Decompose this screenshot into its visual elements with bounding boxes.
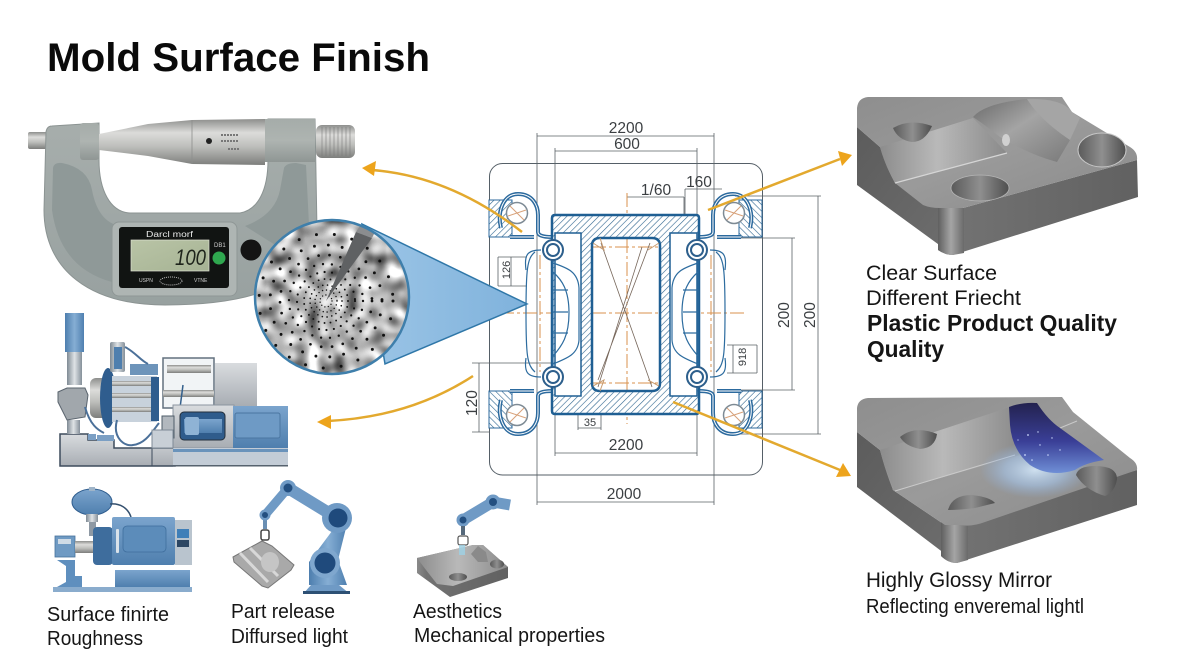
block top face bbox=[857, 97, 1137, 208]
caption: part release bbox=[231, 601, 348, 648]
right cavity bbox=[670, 233, 697, 396]
dimension labels: 918 bbox=[737, 348, 749, 366]
knurled knob bbox=[316, 125, 355, 158]
valve block bbox=[58, 388, 88, 420]
right ridge bbox=[1060, 421, 1077, 428]
right cam profile bbox=[672, 250, 726, 377]
gripped mold part bbox=[233, 541, 294, 588]
caption: part release: Part release bbox=[231, 601, 335, 623]
console window bbox=[180, 412, 225, 440]
caption: glossy mirror: Reflecting enveremal lightl bbox=[866, 596, 1084, 618]
dimension labels bbox=[464, 120, 819, 503]
lower label left: USPN bbox=[139, 278, 153, 284]
collar left bbox=[80, 123, 99, 160]
left cam profile bbox=[525, 250, 579, 377]
caption: glossy mirror: Highly Glossy Mirror bbox=[866, 569, 1052, 592]
rear hub and platen bbox=[90, 378, 108, 418]
status LED bbox=[212, 252, 226, 264]
vertical hopper column bbox=[65, 313, 84, 352]
right recess bbox=[245, 163, 309, 248]
caption: aesthetics bbox=[413, 601, 605, 647]
drawing outer frame bbox=[490, 164, 762, 475]
clamp frame bbox=[163, 358, 214, 408]
dimension labels: 600 bbox=[614, 136, 640, 153]
dimension labels: 2200 bbox=[609, 437, 644, 454]
right hole bbox=[1078, 133, 1126, 167]
dimension lines bbox=[472, 133, 821, 505]
icon: digital micrometer bbox=[28, 119, 355, 305]
magnified textured surface bbox=[250, 215, 415, 380]
arm bbox=[463, 502, 510, 520]
left control box bbox=[55, 536, 75, 557]
LCD brand text: Darcl morf bbox=[146, 230, 194, 239]
title: Mold Surface Finish bbox=[47, 36, 430, 80]
corner brackets bbox=[489, 194, 762, 434]
joints bbox=[280, 480, 296, 496]
tapered barrel bbox=[99, 119, 265, 165]
upper arm links bbox=[288, 488, 337, 518]
arrow: drawing to glossy block bbox=[673, 402, 851, 477]
control console bbox=[173, 405, 234, 448]
hoses bbox=[85, 347, 159, 445]
small label: DB1 bbox=[214, 243, 226, 249]
nozzle block bbox=[162, 416, 174, 438]
front hole bbox=[951, 175, 1009, 201]
mirror galaxy reflection bbox=[1009, 403, 1104, 473]
center lines bbox=[500, 193, 745, 424]
dimension labels: 120 bbox=[464, 390, 481, 416]
dimension labels: 2000 bbox=[607, 486, 642, 503]
lower ridge bbox=[895, 455, 1015, 491]
rear pocket bbox=[893, 122, 932, 142]
caption: surface finish: Roughness bbox=[47, 628, 143, 650]
dimension labels: 200 bbox=[776, 302, 793, 328]
lower label right: VTNE bbox=[194, 278, 208, 284]
caption: aesthetics: Mechanical properties bbox=[414, 625, 605, 647]
block top face bbox=[857, 397, 1137, 526]
side control panel bbox=[175, 520, 192, 565]
pedestal bbox=[115, 570, 190, 587]
dimension labels: 35 bbox=[584, 417, 596, 429]
sloped band bbox=[880, 407, 1020, 491]
block left face bbox=[857, 432, 957, 563]
top cylinder bbox=[110, 342, 125, 372]
hose bbox=[110, 504, 131, 517]
arrow: drawing to molding machine bbox=[317, 376, 473, 429]
dimension labels: 2200 bbox=[609, 120, 644, 137]
anvil bbox=[28, 132, 48, 149]
rear cylinder housing bbox=[215, 363, 257, 406]
caption: part release: Diffursed light bbox=[231, 626, 348, 648]
window cross lines bbox=[598, 243, 652, 387]
block right face bbox=[941, 470, 1137, 563]
console panel bbox=[235, 413, 280, 438]
dimension labels: 1/60 bbox=[641, 182, 671, 199]
injection barrel bbox=[75, 541, 97, 553]
right hole bbox=[1076, 466, 1117, 496]
C-frame body bbox=[44, 119, 317, 305]
lens ring bbox=[255, 220, 409, 374]
block: glossy mirror steel part bbox=[857, 397, 1137, 563]
reflection glow bbox=[980, 442, 1090, 498]
window corner marks bbox=[593, 238, 659, 391]
caption: surface finish: Surface finirte bbox=[47, 604, 169, 626]
machine base bbox=[60, 434, 175, 466]
technical mold drawing bbox=[464, 120, 821, 505]
block right face bbox=[938, 160, 1138, 255]
push button bbox=[240, 240, 262, 260]
rear pocket bbox=[900, 430, 937, 449]
caption: clear surface: Quality bbox=[867, 336, 944, 362]
band ridge bbox=[895, 153, 1007, 183]
sloped band bbox=[880, 118, 1007, 183]
front pocket bbox=[948, 495, 995, 510]
block corner highlight bbox=[938, 208, 964, 255]
magnifier callout cone bbox=[362, 224, 527, 364]
main housing bbox=[112, 517, 175, 565]
base plate bbox=[53, 587, 192, 592]
front platen bbox=[151, 377, 159, 421]
accumulator sphere bbox=[72, 489, 112, 515]
arrow: drawing to micrometer bbox=[362, 161, 522, 232]
block corner highlight bbox=[941, 520, 968, 563]
drive flange bbox=[93, 527, 113, 565]
tie bars bbox=[112, 376, 157, 422]
left cavity bbox=[555, 233, 581, 396]
robot base bbox=[303, 585, 350, 594]
lens background bbox=[256, 221, 408, 373]
central hatched core bbox=[552, 215, 699, 414]
cavity highlight bbox=[1002, 134, 1010, 146]
logo oval bbox=[160, 277, 182, 285]
display housing bbox=[119, 227, 229, 288]
small metal block bbox=[417, 545, 508, 597]
dimension labels: 126 bbox=[501, 261, 513, 279]
caption: clear surface: Clear Surface bbox=[866, 261, 997, 285]
LCD reading: 100 bbox=[175, 245, 207, 270]
icon: injection molding machine bbox=[58, 313, 288, 466]
gripper bbox=[261, 530, 269, 540]
cavity shoulder bbox=[1027, 99, 1080, 140]
display bezel bbox=[112, 222, 237, 296]
freeform cavity bbox=[973, 99, 1070, 162]
block left face bbox=[857, 127, 953, 255]
icon: robot arm polishing block bbox=[417, 494, 510, 597]
LCD screen bbox=[131, 240, 209, 271]
caption: aesthetics: Aesthetics bbox=[413, 601, 502, 623]
dimension labels: 160 bbox=[686, 174, 712, 191]
arrow: drawing to clear surface block bbox=[708, 151, 852, 210]
caption: clear surface: Plastic Product Quality bbox=[867, 310, 1117, 336]
caption: clear surface: Different Friecht bbox=[866, 286, 1021, 310]
caption: surface finish bbox=[47, 604, 169, 650]
block: clear surface steel part bbox=[857, 97, 1138, 255]
left recess bbox=[52, 163, 120, 282]
collar right bbox=[265, 119, 315, 162]
caption: clear surface bbox=[866, 261, 1117, 362]
dimension labels: 200 bbox=[802, 302, 819, 328]
icon: small molding unit bbox=[53, 487, 192, 592]
guide bushings bbox=[543, 240, 707, 387]
caption: glossy mirror bbox=[866, 569, 1084, 618]
icon: robot arm with part bbox=[233, 480, 352, 594]
